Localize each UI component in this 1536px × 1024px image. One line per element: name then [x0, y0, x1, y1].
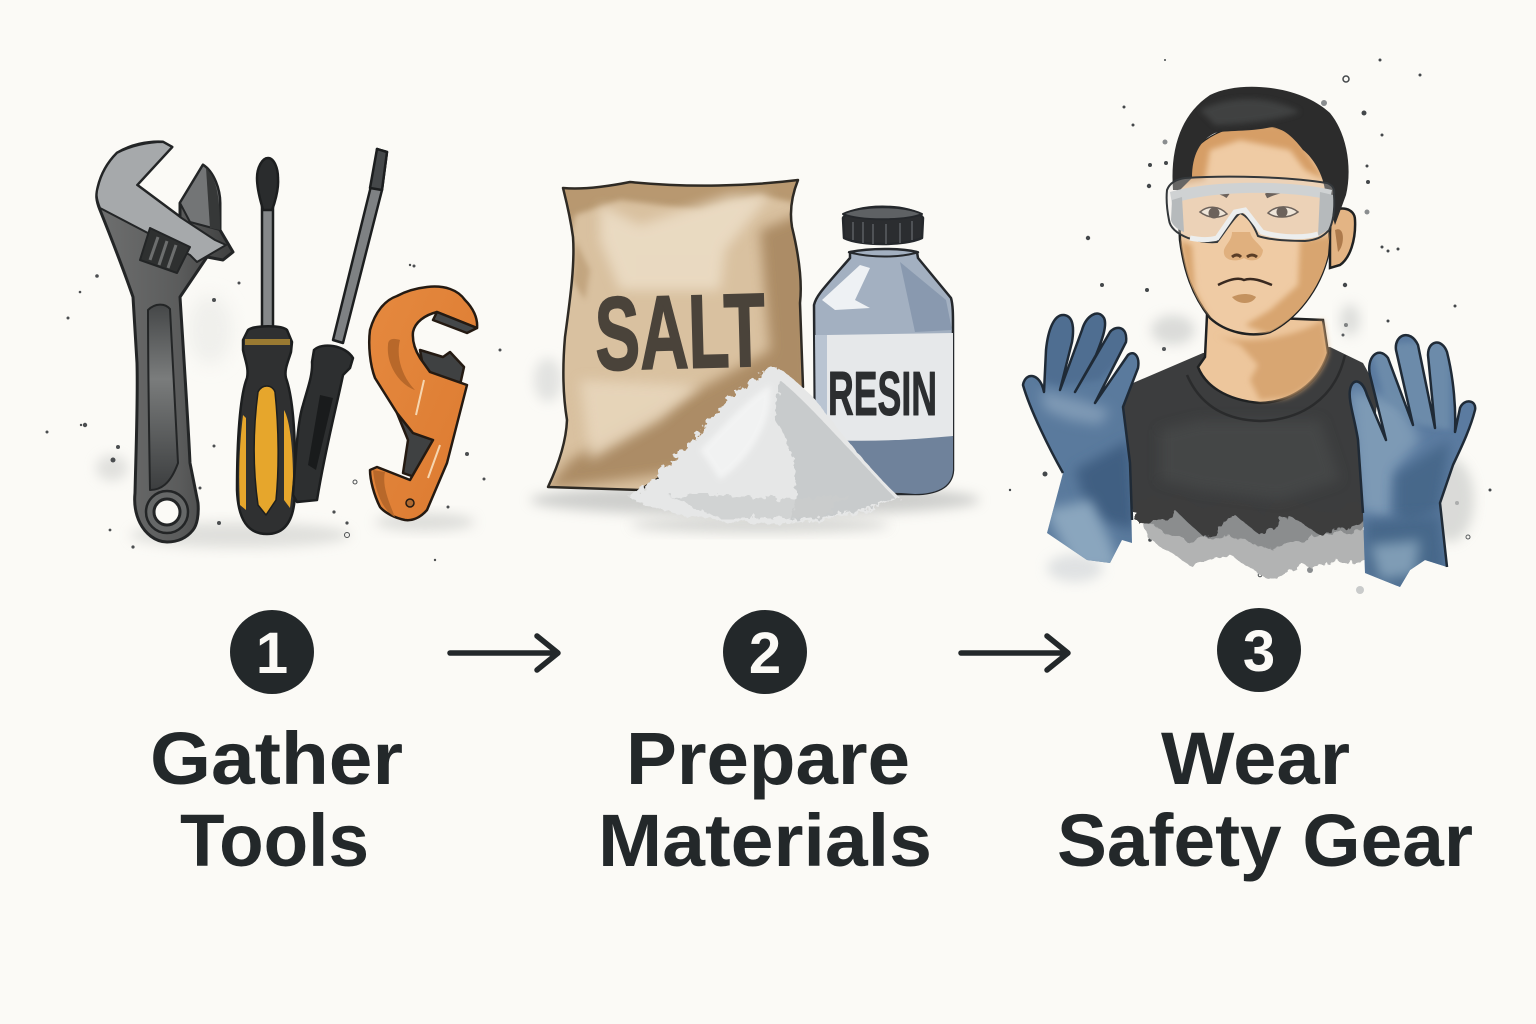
illustration: safety gear person [1009, 58, 1492, 594]
label: Gather Tools: Tools [180, 799, 369, 882]
icon: flat screwdriver [293, 149, 387, 502]
hair [1172, 87, 1349, 225]
step 3 badge [1217, 608, 1301, 692]
label: Gather Tools: Gather [150, 717, 403, 800]
facial features [1193, 189, 1304, 196]
icon: resin bottle [814, 207, 953, 494]
icon: left glove [1020, 310, 1140, 570]
tools ground wash [96, 295, 475, 548]
illustration: tools [46, 142, 502, 561]
step 1 badge: 1 [256, 621, 288, 686]
step 3 badge: 3 [1243, 619, 1275, 684]
person wash [1047, 304, 1474, 582]
label: Wear Safety Gear: Safety Gear [1057, 799, 1473, 882]
neck [1187, 315, 1345, 421]
icon: safety goggles [1167, 177, 1334, 242]
step 1 badge [230, 610, 314, 694]
bag label: SALT: SALT [594, 273, 767, 393]
arrow 2 to 3 [961, 636, 1068, 670]
icon: orange pipe cutter [369, 287, 477, 520]
illustration: materials [530, 175, 980, 533]
icon: yellow screwdriver [237, 158, 295, 534]
icon: adjustable wrench [97, 142, 233, 542]
label: Prepare Materials [598, 717, 932, 882]
ear [1330, 209, 1355, 268]
t-shirt torso [1123, 347, 1378, 580]
label: Prepare Materials: Prepare [626, 717, 910, 800]
tools splatter [46, 264, 502, 561]
arrow 1 to 2 [450, 636, 558, 670]
bottle label: RESIN: RESIN [828, 360, 937, 429]
icon: salt bag [545, 175, 812, 490]
label: Gather Tools [150, 717, 403, 882]
label: Wear Safety Gear [1057, 717, 1473, 882]
icon: salt pile [630, 367, 900, 523]
step 2 badge: 2 [749, 621, 781, 686]
label: Wear Safety Gear: Wear [1161, 717, 1350, 800]
step 2 badge [723, 610, 807, 694]
head [1172, 87, 1349, 335]
icon: right glove [1350, 335, 1475, 590]
person splatter [1009, 58, 1492, 594]
label: Prepare Materials: Materials [598, 799, 932, 882]
materials ground wash [530, 358, 980, 533]
